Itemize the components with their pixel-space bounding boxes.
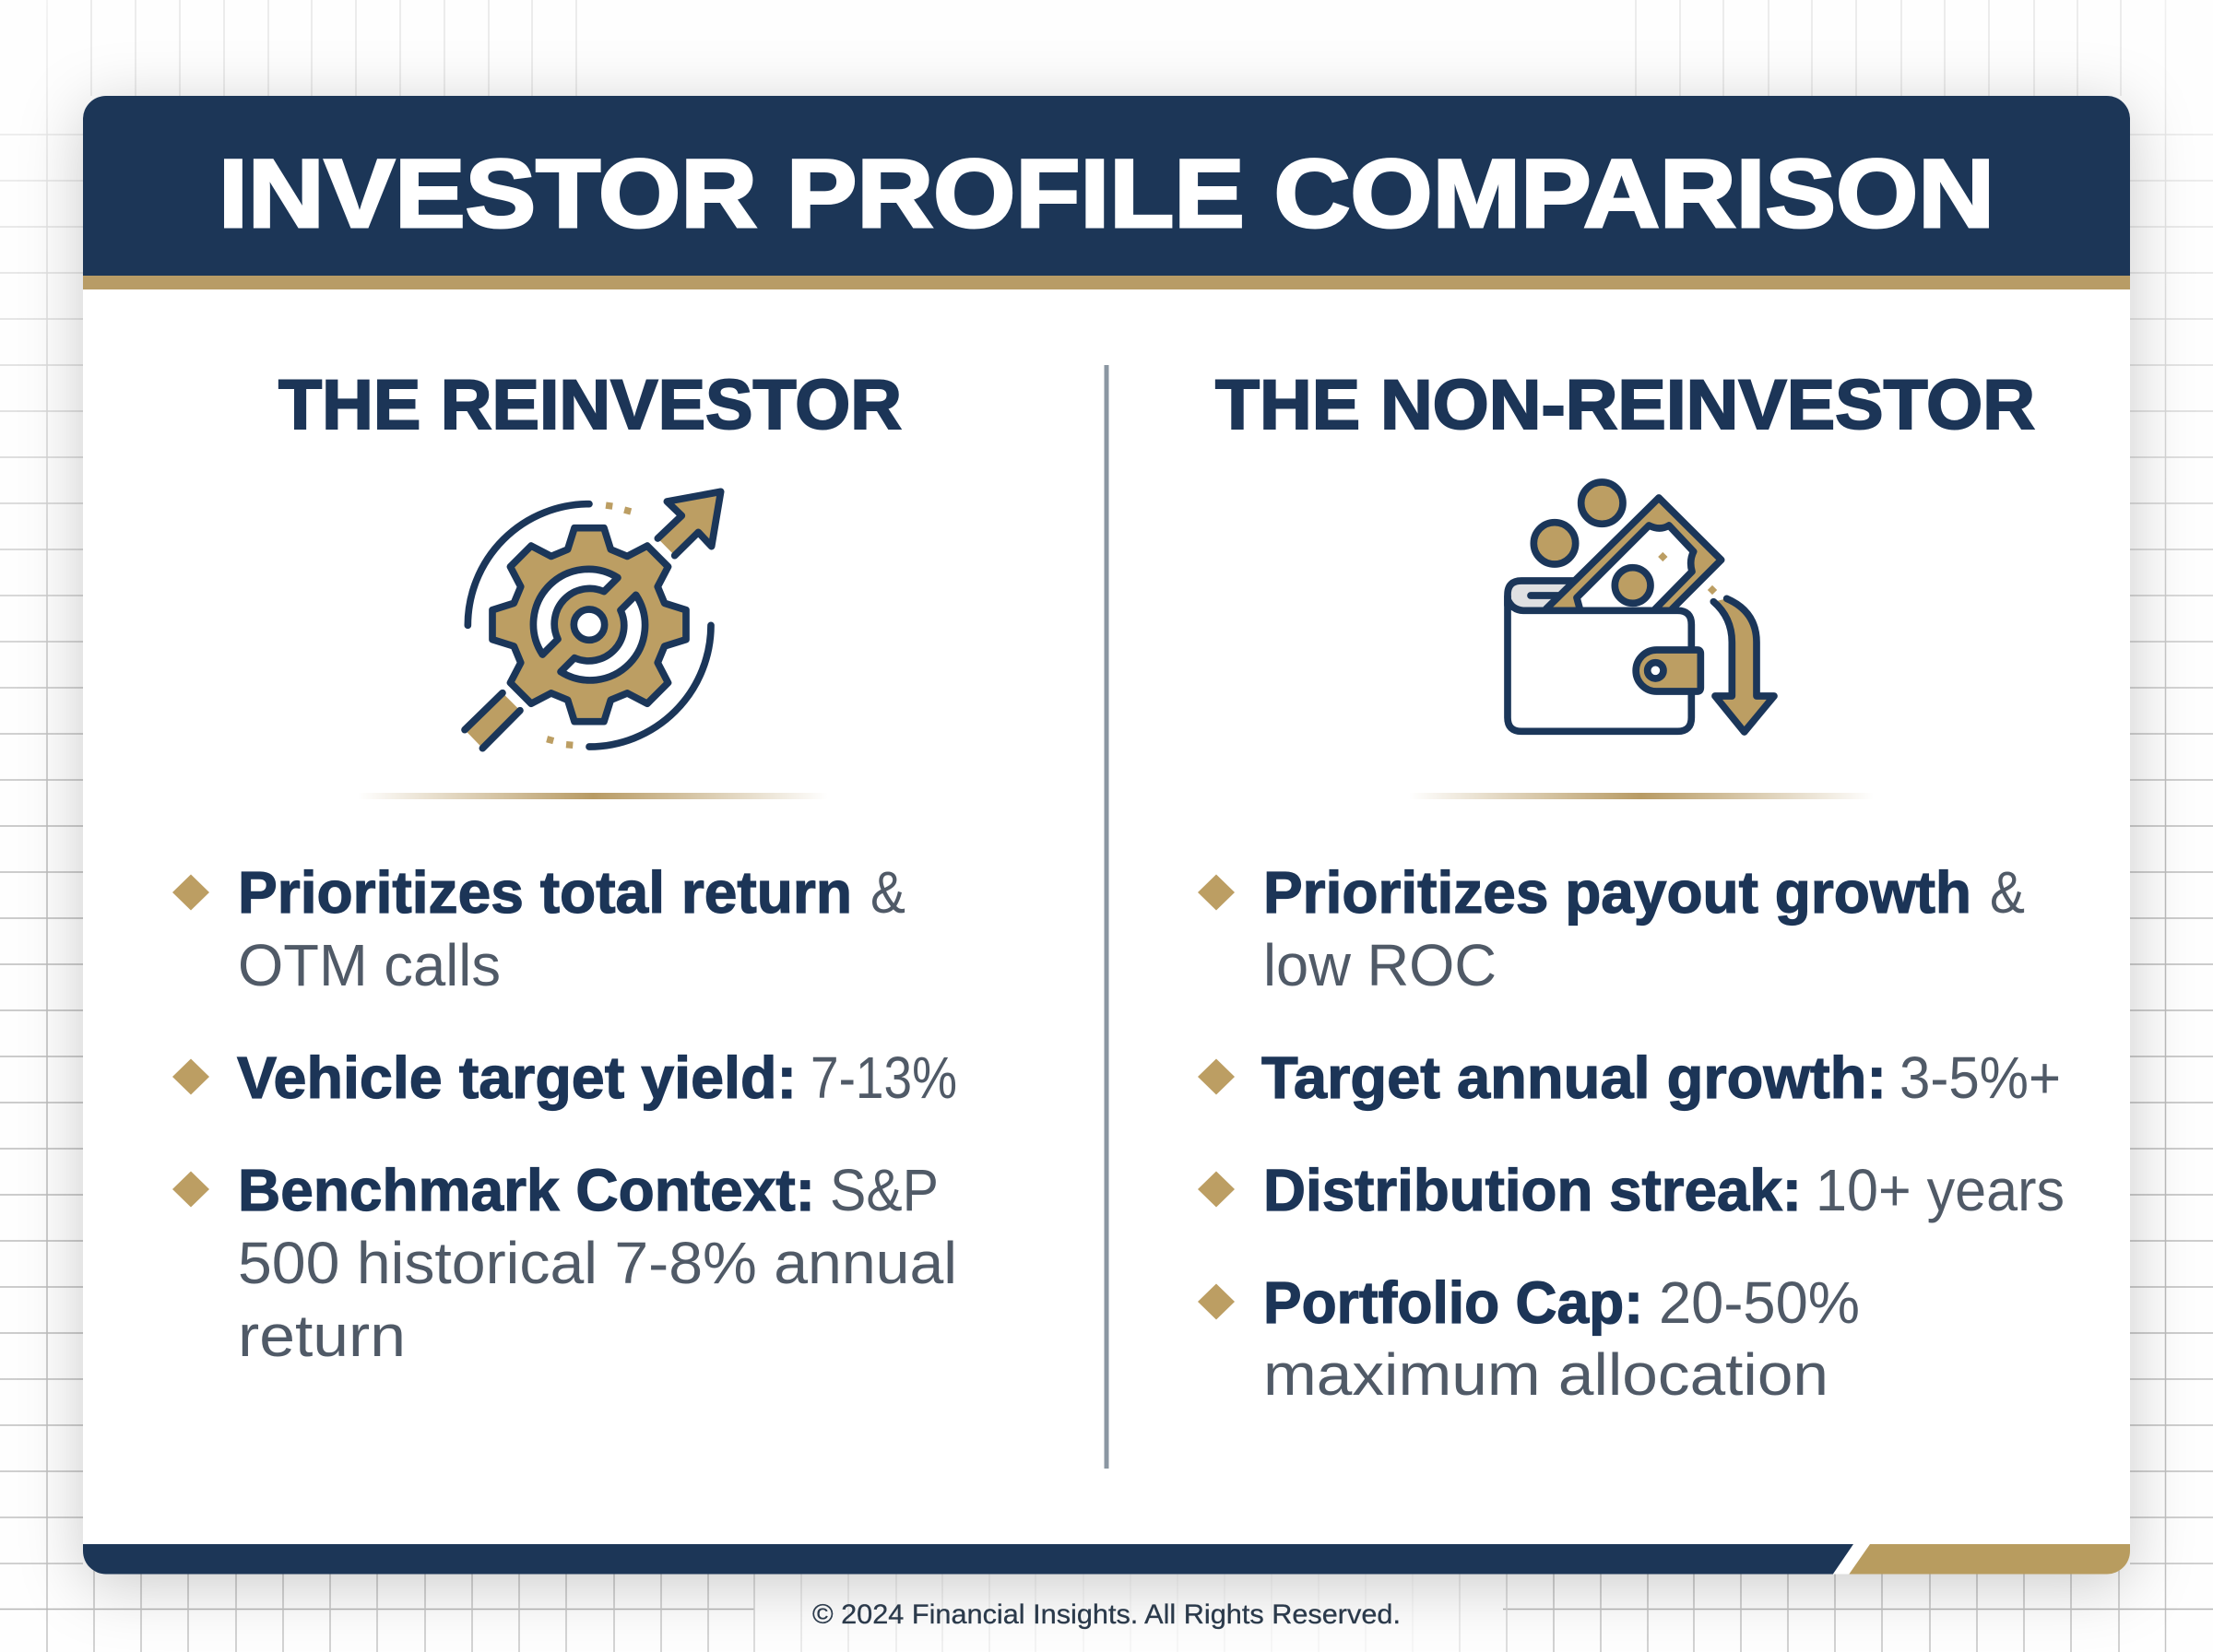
footer bar (83, 1544, 2130, 1575)
header band (83, 96, 2130, 289)
bullet: distribution streak: Distribution streak: (1263, 1157, 1802, 1223)
center divider (1105, 365, 1108, 1469)
bullet: benchmark context: 500 historical 7-8% annual (238, 1230, 957, 1296)
divider: gold fade right (1409, 793, 1874, 799)
bullet: total return (172, 859, 905, 998)
bullet: vehicle target yield: 7-13% (811, 1044, 957, 1111)
bullet: payout growth (1198, 859, 2025, 998)
icon: gear with upward arrow (465, 491, 721, 749)
bullet: portfolio cap (1198, 1269, 1860, 1408)
bullet: payout growth: low ROC (1263, 932, 1497, 998)
bullet: portfolio cap: 20-50% (1659, 1269, 1860, 1336)
bullet: benchmark context (172, 1157, 957, 1369)
bullet: total return: Prioritizes total return (238, 859, 852, 926)
icon: wallet with cash and down arrow (1508, 482, 1774, 732)
panel: the non-reinvestor (1198, 366, 2065, 1408)
heading: the reinvestor: THE REINVESTOR (278, 366, 902, 444)
bullet: payout growth: Prioritizes payout growth (1263, 859, 1971, 926)
bullet: distribution streak (1198, 1157, 2065, 1223)
panel: the reinvestor (172, 366, 957, 1369)
bullet: portfolio cap: maximum allocation (1263, 1341, 1828, 1408)
bullet: total return: & (870, 859, 905, 926)
bullet: benchmark context: S&P (830, 1157, 939, 1223)
bullet: portfolio cap: Portfolio Cap: (1263, 1269, 1643, 1336)
bullet: benchmark context: Benchmark Context: (238, 1157, 815, 1223)
copyright: © 2024 Financial Insights. All Rights Reserved. (812, 1599, 1401, 1630)
heading: the non-reinvestor: THE NON-REINVESTOR (1215, 366, 2035, 444)
bullet: benchmark context: return (238, 1303, 406, 1369)
divider: gold fade (358, 793, 828, 799)
bullet: distribution streak: 10+ years (1816, 1157, 2065, 1223)
title: INVESTOR PROFILE COMPARISON (219, 140, 1994, 248)
bullet: payout growth: & (1990, 859, 2025, 926)
bullet: target annual growth: Target annual growth: (1261, 1044, 1887, 1111)
bullet: total return: OTM calls (238, 932, 501, 998)
bullet: target annual growth: 3-5%+ (1899, 1044, 2061, 1111)
bullet: vehicle target yield: Vehicle target yield: (237, 1044, 797, 1111)
